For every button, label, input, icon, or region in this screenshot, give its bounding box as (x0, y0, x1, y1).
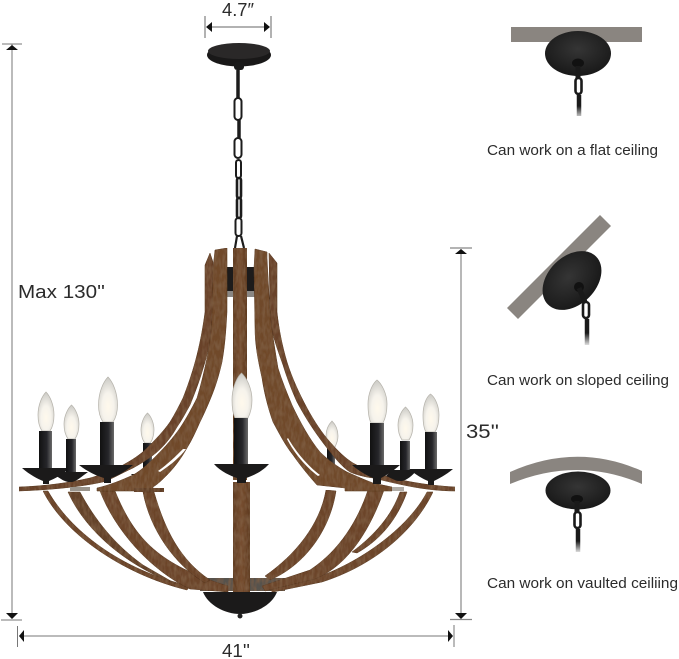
bottom bowl (203, 592, 277, 618)
chain flat (570, 58, 586, 120)
hanging chain (234, 70, 244, 248)
dimension: width 41 inches (18, 625, 454, 659)
dimension: body height 35 inches (450, 248, 499, 620)
chain sloped (574, 282, 594, 347)
canopy sloped (531, 239, 613, 322)
central wood post (233, 248, 250, 592)
lower wood arms (43, 490, 433, 592)
chandelier (19, 43, 455, 618)
label: Max 130 inches: Max 130'' (18, 281, 105, 302)
caption flat: Can work on a flat ceiling (487, 142, 658, 159)
candle 5 centre (214, 373, 269, 483)
candle 2 (56, 405, 88, 482)
chain vaulted (570, 495, 586, 554)
upper wood arms (19, 248, 455, 492)
caption sloped: Can work on sloped ceiling (487, 372, 669, 389)
ceiling canopy (207, 43, 271, 70)
ceiling slab vaulted (510, 457, 642, 484)
candle 1 (22, 392, 70, 484)
panel: sloped ceiling (487, 215, 669, 389)
top hub (227, 267, 255, 297)
dimension: canopy width 4.7 inches (205, 0, 271, 38)
canopy vaulted (546, 472, 610, 510)
ceiling slab sloped (507, 215, 611, 319)
arm: right outer (269, 253, 455, 491)
candle 8 (386, 407, 417, 481)
dimension: maximum height 130 inches (1, 44, 105, 620)
candle 6 rear right (314, 421, 348, 484)
arm: left inner (97, 248, 227, 491)
caption vaulted: Can work on vaulted ceiliing (487, 575, 678, 592)
candle 3 (79, 377, 133, 483)
panel: vaulted ceiling (487, 457, 678, 592)
candle 9 (409, 394, 453, 485)
candle 4 rear left (131, 413, 165, 484)
arm highlights (70, 438, 404, 491)
label: 35 inches: 35'' (466, 422, 499, 443)
candle 7 (352, 380, 400, 484)
panel: flat ceiling (487, 27, 658, 159)
canopy flat (545, 31, 611, 76)
arm: right inner (254, 249, 392, 491)
label: 4.7 inches: 4.7″ (222, 0, 255, 20)
ceiling slab flat (511, 27, 642, 42)
arm: left outer (19, 253, 213, 491)
